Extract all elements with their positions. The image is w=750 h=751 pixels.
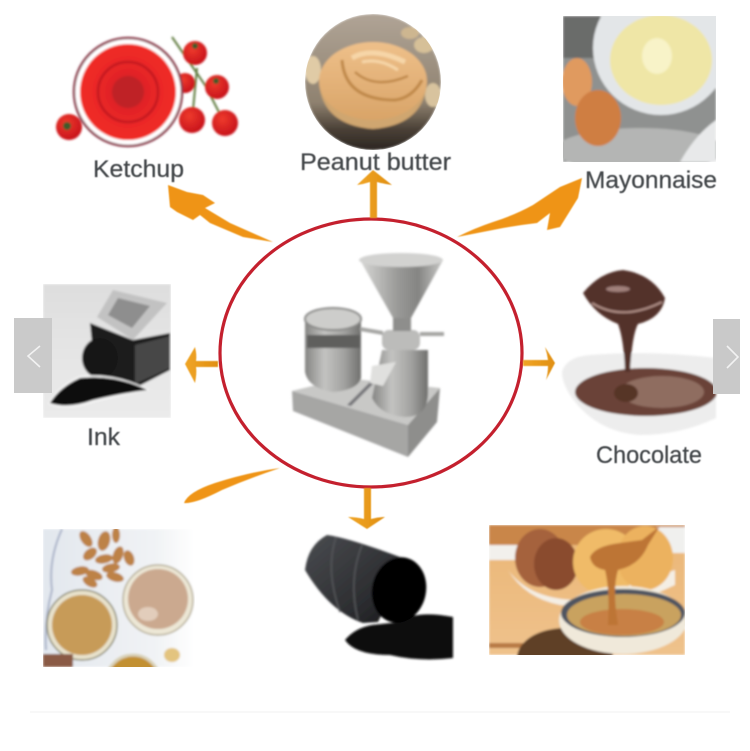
carousel button: next	[713, 319, 740, 394]
mayonnaise image	[563, 16, 716, 162]
arrow: to chocolate	[523, 347, 555, 380]
mayonnaise label: Mayonnaise	[585, 167, 717, 194]
plate and cookies	[508, 526, 675, 606]
jar: light almond butter	[123, 565, 193, 635]
carousel button: previous	[14, 318, 52, 393]
product: caramel sauce	[489, 525, 685, 655]
chocolate label: Chocolate	[596, 442, 702, 469]
jar: lower	[108, 652, 158, 667]
ketchup label: Ketchup	[93, 156, 184, 183]
peanut butter label: Peanut butter	[300, 149, 451, 176]
spoon and stream	[590, 526, 660, 625]
product: nut butter jars	[43, 529, 195, 667]
machine hopper	[359, 253, 443, 318]
bowl of sauce	[559, 586, 687, 654]
machine motor	[305, 308, 361, 392]
arrow: to oil barrel	[348, 488, 385, 529]
almonds	[70, 527, 136, 590]
peanut butter image	[305, 14, 441, 150]
arrow: to peanut butter	[357, 170, 392, 218]
ink label: Ink	[87, 424, 121, 451]
arrow: to ketchup	[168, 185, 273, 242]
product: ink	[43, 284, 171, 451]
chocolate image	[562, 270, 717, 435]
product: black oil barrel	[305, 535, 453, 659]
arrow: to nut butter jars	[184, 468, 280, 503]
central red circle	[220, 219, 522, 487]
jar: peanut butter	[47, 590, 117, 660]
machine: colloid mill	[292, 253, 444, 457]
barrel opening	[366, 552, 432, 628]
arrow: to mayonnaise	[457, 178, 582, 237]
puddle	[345, 614, 453, 659]
product: chocolate	[562, 270, 717, 469]
tray	[516, 627, 614, 655]
arrow: to ink	[185, 347, 218, 383]
ketchup image	[56, 37, 238, 146]
machine base	[292, 378, 440, 457]
ink image	[43, 284, 171, 418]
product: mayonnaise	[563, 16, 717, 194]
machine grinding column	[360, 316, 444, 417]
barrel body	[305, 535, 408, 623]
product: peanut butter	[300, 14, 451, 176]
product: ketchup	[56, 37, 238, 183]
